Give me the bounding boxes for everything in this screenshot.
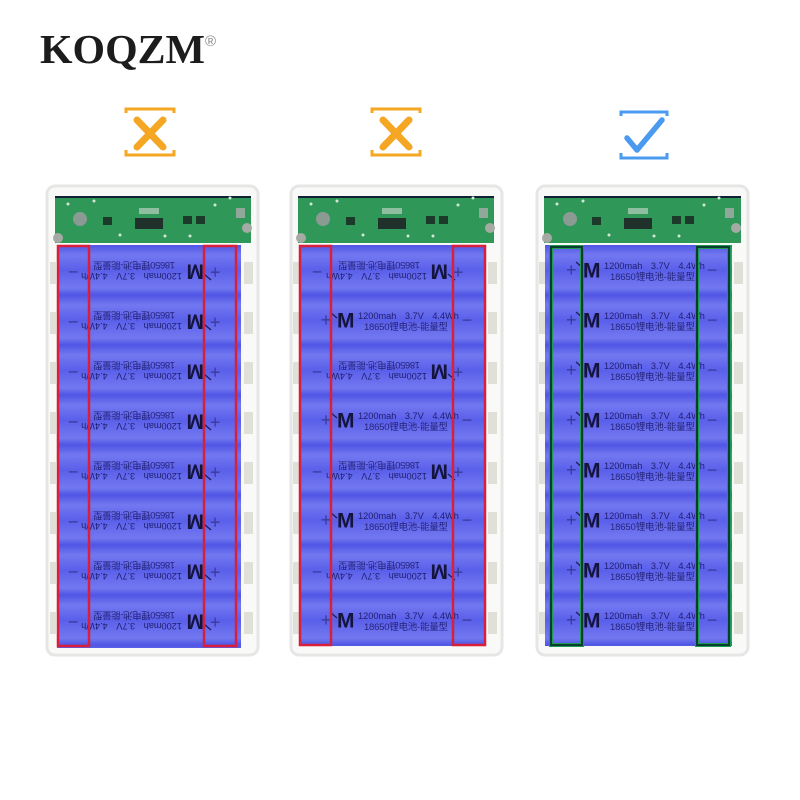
battery labels, reversed: 18650锂电池-能量型 xyxy=(93,459,175,471)
battery labels, alternating: 18650锂电池-能量型 xyxy=(338,259,420,271)
battery labels, alternating: + xyxy=(453,562,463,582)
battery labels, alternating: 18650锂电池-能量型 xyxy=(338,459,420,471)
battery labels, alternating: 18650锂电池-能量型 xyxy=(364,621,448,633)
battery labels, reversed: − xyxy=(68,512,78,532)
battery labels, reversed: M xyxy=(186,510,204,532)
green outlines xyxy=(551,247,729,645)
battery labels, alternating: M xyxy=(430,260,448,282)
circuit board xyxy=(53,196,252,243)
battery labels, reversed: 18650锂电池-能量型 xyxy=(93,409,175,421)
battery labels, alternating: 18650锂电池-能量型 xyxy=(338,359,420,371)
battery labels, all correct: − xyxy=(707,410,718,430)
case frame xyxy=(537,186,748,655)
battery labels, reversed: 18650锂电池-能量型 xyxy=(93,609,175,621)
battery labels, alternating xyxy=(312,259,472,633)
case frame xyxy=(291,186,502,655)
battery labels, all correct: + xyxy=(566,310,577,330)
battery labels, all correct: − xyxy=(707,460,718,480)
brand logo: KOQZM xyxy=(40,26,205,72)
battery cells xyxy=(299,245,485,646)
battery labels, alternating: 1200mah 3.7V 4.4Wh xyxy=(358,311,459,321)
battery labels, alternating: + xyxy=(453,462,463,482)
battery labels, all correct: − xyxy=(707,510,718,530)
battery labels, reversed: − xyxy=(68,312,78,332)
panel: wrong placement, alternating xyxy=(291,186,502,655)
battery labels, all correct: − xyxy=(707,360,718,380)
battery labels, all correct: M xyxy=(583,360,600,382)
battery labels, all correct: M xyxy=(583,610,600,632)
side clips xyxy=(539,262,743,634)
battery labels, all correct: + xyxy=(566,460,577,480)
battery labels, alternating: M xyxy=(430,560,448,582)
battery labels, reversed: + xyxy=(210,262,220,282)
battery labels, reversed: 1200mah 3.7V 4.4Wh xyxy=(81,271,182,281)
battery labels, alternating: M xyxy=(337,610,354,632)
battery labels, alternating: − xyxy=(312,562,322,582)
battery labels, all correct: M xyxy=(583,460,600,482)
circuit board xyxy=(296,196,495,243)
battery labels, reversed: 18650锂电池-能量型 xyxy=(93,309,175,321)
battery labels, alternating: 18650锂电池-能量型 xyxy=(364,321,448,333)
battery labels, all correct: 1200mah 3.7V 4.4Wh xyxy=(604,361,705,371)
battery labels, reversed: 1200mah 3.7V 4.4Wh xyxy=(81,621,182,631)
case frame xyxy=(47,186,258,655)
brand logo: ® xyxy=(205,33,216,50)
battery labels, alternating: − xyxy=(462,310,472,330)
battery cells xyxy=(57,245,241,648)
battery labels, reversed: − xyxy=(68,562,78,582)
circuit board xyxy=(542,196,741,243)
battery labels, alternating: 18650锂电池-能量型 xyxy=(364,521,448,533)
battery labels, alternating: − xyxy=(312,462,322,482)
battery labels, reversed: 1200mah 3.7V 4.4Wh xyxy=(81,421,182,431)
battery labels, all correct: 18650锂电池-能量型 xyxy=(610,371,695,383)
battery labels, reversed: − xyxy=(68,462,78,482)
battery labels, reversed: 18650锂电池-能量型 xyxy=(93,559,175,571)
battery labels, alternating: − xyxy=(312,362,322,382)
battery labels, all correct: 1200mah 3.7V 4.4Wh xyxy=(604,261,705,271)
battery labels, reversed: M xyxy=(186,260,204,282)
battery labels, reversed: + xyxy=(210,462,220,482)
battery labels, reversed: 1200mah 3.7V 4.4Wh xyxy=(81,571,182,581)
battery labels, alternating: M xyxy=(337,310,354,332)
battery labels, reversed xyxy=(68,259,220,632)
battery labels, reversed: − xyxy=(68,412,78,432)
red outlines xyxy=(300,246,485,645)
battery labels, reversed: M xyxy=(186,460,204,482)
battery labels, all correct: 1200mah 3.7V 4.4Wh xyxy=(604,311,705,321)
side clips xyxy=(293,262,497,634)
battery labels, alternating: M xyxy=(430,360,448,382)
battery labels, reversed: + xyxy=(210,362,220,382)
battery labels, all correct: 1200mah 3.7V 4.4Wh xyxy=(604,461,705,471)
battery labels, all correct: 1200mah 3.7V 4.4Wh xyxy=(604,611,705,621)
battery labels, reversed: M xyxy=(186,410,204,432)
side clips xyxy=(50,262,253,634)
battery labels, reversed: M xyxy=(186,310,204,332)
battery labels, alternating: M xyxy=(337,510,354,532)
battery labels, alternating: + xyxy=(453,362,463,382)
battery labels, reversed: 18650锂电池-能量型 xyxy=(93,359,175,371)
battery labels, reversed: + xyxy=(210,562,220,582)
battery labels, all correct: − xyxy=(707,310,718,330)
battery labels, all correct: 1200mah 3.7V 4.4Wh xyxy=(604,511,705,521)
battery labels, alternating: − xyxy=(312,262,322,282)
battery labels, alternating: M xyxy=(430,460,448,482)
battery labels, reversed: M xyxy=(186,360,204,382)
battery labels, all correct: M xyxy=(583,410,600,432)
battery labels, all correct: M xyxy=(583,260,600,282)
battery labels, all correct: 18650锂电池-能量型 xyxy=(610,571,695,583)
red outlines xyxy=(58,246,236,646)
panel: wrong placement, all reversed xyxy=(47,186,258,655)
battery labels, reversed: − xyxy=(68,362,78,382)
battery labels, reversed: 18650锂电池-能量型 xyxy=(93,259,175,271)
battery labels, all correct: + xyxy=(566,510,577,530)
battery labels, reversed: + xyxy=(210,312,220,332)
battery labels, all correct: M xyxy=(583,310,600,332)
battery labels, all correct: 18650锂电池-能量型 xyxy=(610,521,695,533)
battery labels, all correct: 1200mah 3.7V 4.4Wh xyxy=(604,561,705,571)
battery labels, alternating: 1200mah 3.7V 4.4Wh xyxy=(326,271,427,281)
battery labels, alternating: + xyxy=(453,262,463,282)
icon: orange cross 2 xyxy=(372,109,420,155)
battery labels, alternating: − xyxy=(462,610,472,630)
battery labels, all correct: + xyxy=(566,560,577,580)
icon: blue check xyxy=(621,112,667,158)
battery labels, alternating: 18650锂电池-能量型 xyxy=(364,421,448,433)
battery labels, all correct: 18650锂电池-能量型 xyxy=(610,271,695,283)
panel: correct placement xyxy=(537,186,748,655)
battery labels, alternating: 1200mah 3.7V 4.4Wh xyxy=(326,371,427,381)
battery labels, all correct xyxy=(566,260,718,633)
battery labels, all correct: + xyxy=(566,260,577,280)
battery labels, alternating: + xyxy=(321,610,331,630)
battery labels, reversed: M xyxy=(186,610,204,632)
battery labels, all correct: 18650锂电池-能量型 xyxy=(610,421,695,433)
battery labels, reversed: 1200mah 3.7V 4.4Wh xyxy=(81,521,182,531)
battery labels, all correct: − xyxy=(707,560,718,580)
battery labels, alternating: − xyxy=(462,410,472,430)
battery labels, reversed: 1200mah 3.7V 4.4Wh xyxy=(81,471,182,481)
battery labels, reversed: − xyxy=(68,262,78,282)
battery labels, reversed: 18650锂电池-能量型 xyxy=(93,509,175,521)
battery labels, alternating: M xyxy=(337,410,354,432)
battery labels, alternating: − xyxy=(462,510,472,530)
battery labels, reversed: 1200mah 3.7V 4.4Wh xyxy=(81,321,182,331)
battery labels, reversed: + xyxy=(210,412,220,432)
battery labels, reversed: 1200mah 3.7V 4.4Wh xyxy=(81,371,182,381)
battery labels, alternating: + xyxy=(321,410,331,430)
battery labels, alternating: 1200mah 3.7V 4.4Wh xyxy=(358,411,459,421)
battery labels, reversed: M xyxy=(186,560,204,582)
battery labels, all correct: 18650锂电池-能量型 xyxy=(610,471,695,483)
battery labels, alternating: 1200mah 3.7V 4.4Wh xyxy=(358,611,459,621)
battery labels, alternating: + xyxy=(321,510,331,530)
battery labels, all correct: M xyxy=(583,510,600,532)
battery labels, all correct: 1200mah 3.7V 4.4Wh xyxy=(604,411,705,421)
battery cells xyxy=(545,245,732,646)
battery labels, alternating: + xyxy=(321,310,331,330)
battery labels, all correct: M xyxy=(583,560,600,582)
battery labels, alternating: 18650锂电池-能量型 xyxy=(338,559,420,571)
battery labels, all correct: − xyxy=(707,260,718,280)
battery labels, all correct: − xyxy=(707,610,718,630)
battery labels, reversed: − xyxy=(68,612,78,632)
battery labels, alternating: 1200mah 3.7V 4.4Wh xyxy=(358,511,459,521)
battery labels, alternating: 1200mah 3.7V 4.4Wh xyxy=(326,571,427,581)
battery labels, all correct: + xyxy=(566,410,577,430)
battery labels, all correct: + xyxy=(566,360,577,380)
battery labels, all correct: 18650锂电池-能量型 xyxy=(610,321,695,333)
battery labels, all correct: + xyxy=(566,610,577,630)
battery labels, reversed: + xyxy=(210,512,220,532)
battery labels, all correct: 18650锂电池-能量型 xyxy=(610,621,695,633)
battery labels, reversed: + xyxy=(210,612,220,632)
icon: orange cross 1 xyxy=(126,109,174,155)
battery labels, alternating: 1200mah 3.7V 4.4Wh xyxy=(326,471,427,481)
